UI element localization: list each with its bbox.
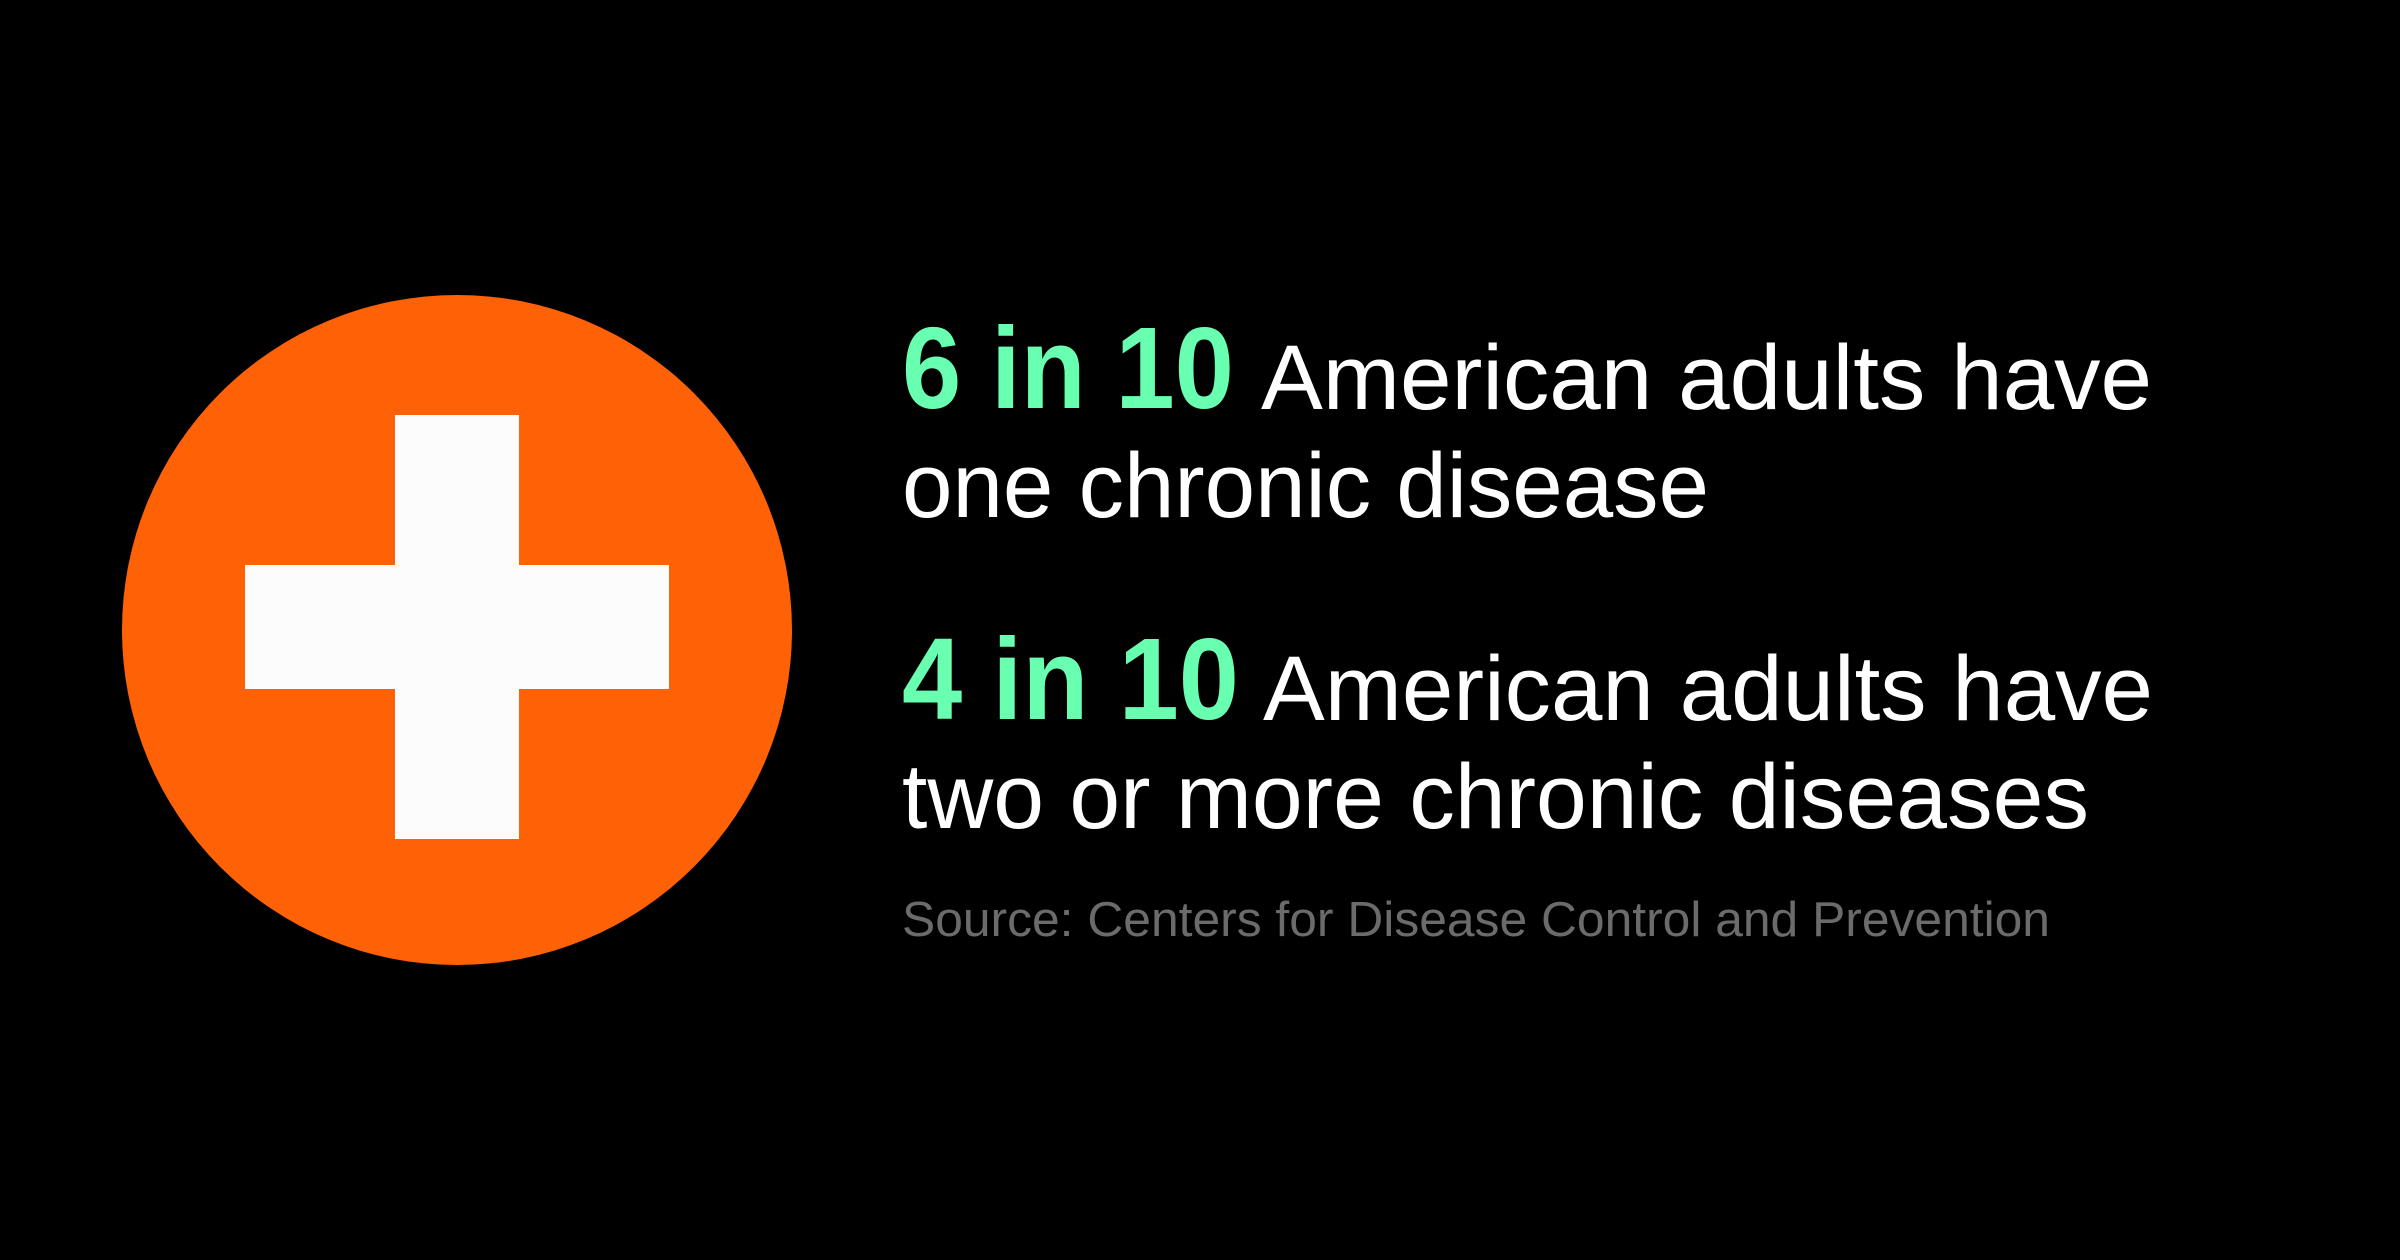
text block: 6 in 10 statistic — [902, 303, 2152, 537]
text block: 6 in 10 statistic: American adults have — [1261, 327, 2152, 429]
source note: Source: Centers for Disease Control and Prevention — [902, 893, 2050, 947]
text block: 4 in 10 statistic: two or more chronic diseases — [902, 746, 2089, 848]
text block: 4 in 10 statistic — [902, 614, 2153, 848]
text block: 4 in 10 statistic: 4 in 10 — [902, 614, 1239, 744]
text block: 6 in 10 statistic: 6 in 10 — [902, 303, 1234, 433]
text block: 4 in 10 statistic: American adults have — [1263, 638, 2153, 740]
text block: 6 in 10 statistic: one chronic disease — [902, 435, 1709, 537]
icon: medical cross in orange circle — [122, 295, 792, 965]
